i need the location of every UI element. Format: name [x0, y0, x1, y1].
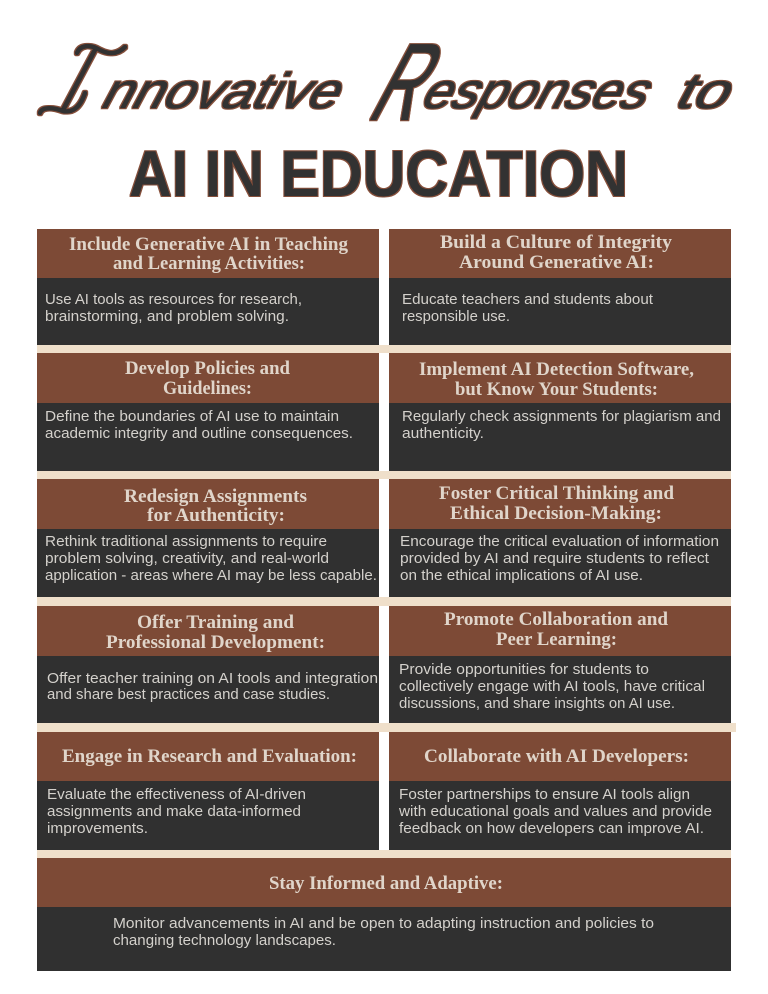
body: Engage in Research: assignments and make data-informed: [47, 804, 301, 820]
heading: Offer Training: Professional Development:: [106, 633, 325, 653]
body: Redesign Assignments: problem solving, creativity, and real-world: [45, 551, 329, 567]
title: script line: [38, 21, 768, 143]
panel: Engage in Research: [37, 732, 379, 850]
heading: Build a Culture: Around Generative AI:: [459, 253, 654, 273]
body: Stay Informed: changing technology landscapes.: [113, 933, 336, 949]
body: Develop Policies: Define the boundaries of AI use to maintain: [45, 409, 339, 425]
heading: Foster Critical Thinking: Ethical Decision-Making:: [450, 504, 662, 524]
body: Redesign Assignments: Rethink traditional assignments to require: [45, 534, 327, 550]
body: Promote Collaboration: collectively engage with AI tools, have critical: [399, 679, 705, 695]
heading: Foster Critical Thinking: Foster Critical Thinking and: [439, 484, 675, 504]
heading: Build a Culture: Build a Culture of Integrity: [440, 233, 673, 253]
body: Collaborate with AI Developers: with educational goals and values and provide: [398, 804, 712, 820]
heading: Stay Informed: Stay Informed and Adaptive:: [269, 874, 503, 894]
title: script line: R: [353, 21, 464, 143]
title: script line: I: [46, 30, 113, 129]
heading: Promote Collaboration: Promote Collaboration and: [444, 610, 669, 630]
heading: Promote Collaboration: Peer Learning:: [496, 630, 617, 650]
body: Develop Policies: academic integrity and outline consequences.: [45, 426, 353, 442]
body: Offer Training: and share best practices and case studies.: [47, 687, 330, 703]
body: Include Generative AI: brainstorming, and problem solving.: [45, 309, 289, 325]
heading: Implement AI Detection: but Know Your Students:: [455, 380, 658, 400]
heading: Collaborate with AI Developers: Collaborate with AI Developers:: [424, 747, 689, 767]
heading: Develop Policies: Develop Policies and: [125, 359, 291, 379]
heading: Redesign Assignments: for Authenticity:: [147, 506, 285, 526]
body: Promote Collaboration: Provide opportunities for students to: [399, 662, 649, 678]
heading: Include Generative AI: and Learning Activities:: [113, 254, 305, 274]
title: script line: to: [666, 64, 747, 119]
body: Stay Informed: Monitor advancements in AI and be open to adapting instruction and policies to: [113, 916, 654, 932]
panel: Build a Culture of Integrity: [389, 229, 731, 345]
panel: Redesign Assignments: [37, 479, 379, 597]
body: Engage in Research: Evaluate the effectiveness of AI-driven: [47, 787, 306, 803]
body: Implement AI Detection: authenticity.: [402, 426, 484, 442]
heading: Implement AI Detection: Implement AI Detection Software,: [419, 360, 694, 380]
body: Promote Collaboration: discussions, and share insights on AI use.: [399, 696, 675, 712]
heading: Include Generative AI: Include Generative AI in Teaching: [69, 235, 349, 255]
body: Foster Critical Thinking: provided by AI and require students to reflect: [400, 551, 709, 567]
panel: Develop Policies: [37, 353, 379, 471]
panel: Stay Informed and Adaptive: [37, 858, 731, 971]
panel: Foster Critical Thinking: [389, 479, 731, 597]
body: Collaborate with AI Developers: Foster partnerships to ensure AI tools align: [399, 787, 690, 803]
body: Offer Training: Offer teacher training on AI tools and integration: [47, 671, 378, 687]
panel: Implement AI Detection: [389, 353, 731, 471]
title: AI in Education: AI IN EDUCATION: [129, 137, 628, 210]
panel: Offer Training: [37, 606, 379, 723]
panel: Include Generative AI: [37, 229, 379, 345]
heading: Offer Training: Offer Training and: [137, 613, 295, 633]
body: Collaborate with AI Developers: feedback on how developers can improve AI.: [399, 821, 704, 837]
body: Engage in Research: improvements.: [47, 821, 148, 837]
body: Foster Critical Thinking: on the ethical implications of AI use.: [400, 568, 643, 584]
body: Build a Culture: Educate teachers and students about: [402, 292, 653, 308]
body: Include Generative AI: Use AI tools as resources for research,: [45, 292, 302, 308]
title: script line: esponses: [412, 64, 665, 119]
body: Foster Critical Thinking: Encourage the critical evaluation of information: [400, 534, 719, 550]
panel: Collaborate with AI Developers: [389, 732, 731, 850]
body: Implement AI Detection: Regularly check assignments for plagiarism and: [402, 409, 721, 425]
heading: Engage in Research: Engage in Research and Evaluation:: [62, 747, 357, 767]
panel: Promote Collaboration: [389, 606, 731, 723]
heading: Redesign Assignments: Redesign Assignments: [124, 487, 307, 507]
title: script line: nnovative: [92, 64, 357, 119]
heading: Develop Policies: Guidelines:: [163, 379, 252, 399]
body: Build a Culture: responsible use.: [402, 309, 510, 325]
body: Redesign Assignments: application - areas where AI may be less capable.: [45, 568, 377, 584]
